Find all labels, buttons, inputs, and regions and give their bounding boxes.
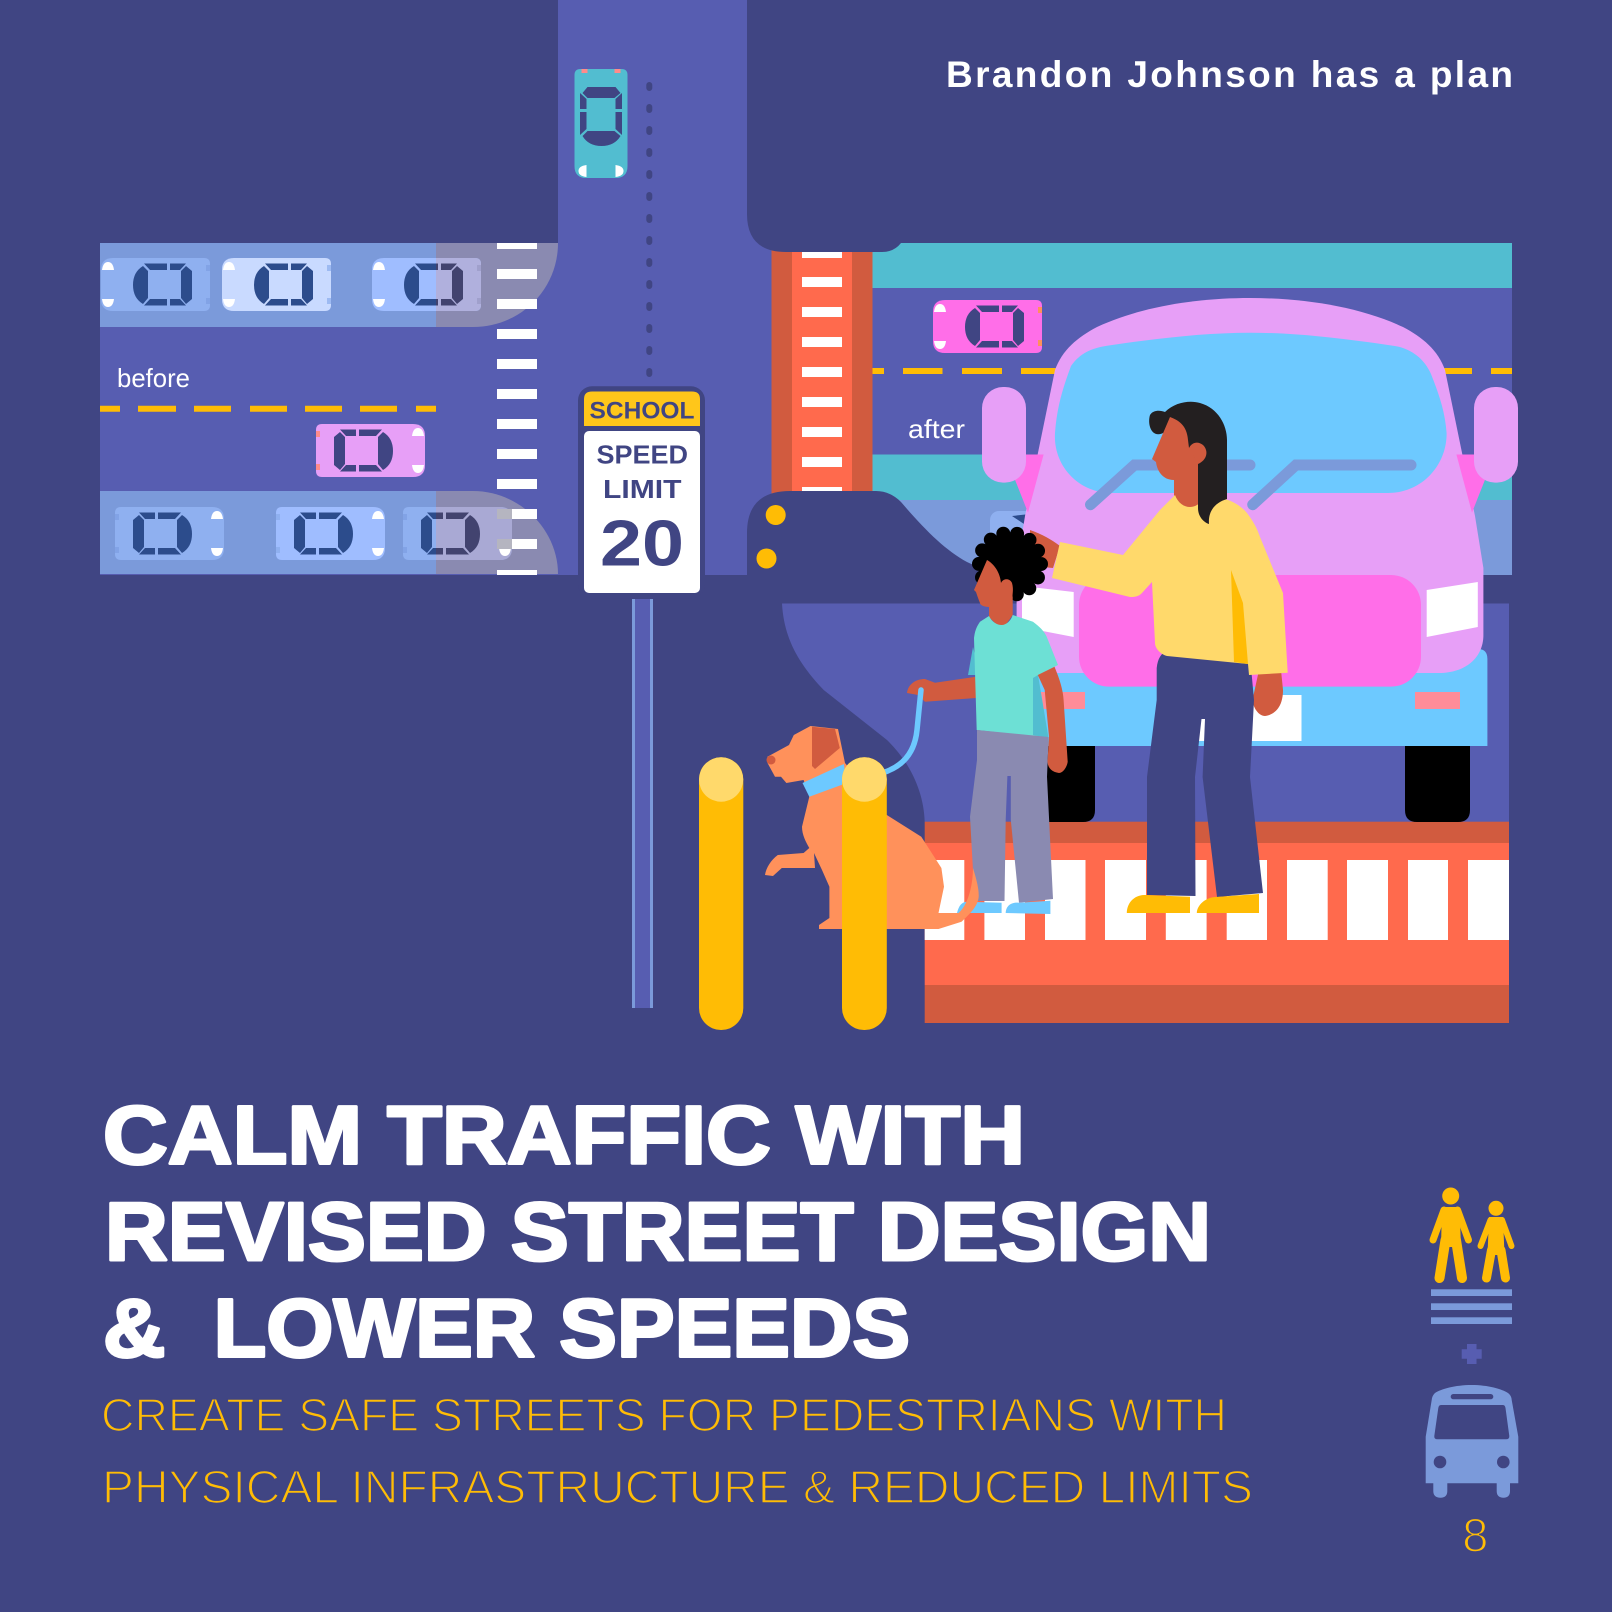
- curb extension top: [436, 243, 558, 327]
- illustration: boy: [907, 533, 1068, 914]
- licence plate: [1198, 695, 1302, 741]
- illustration: bus: [982, 298, 1518, 822]
- shoes: [957, 901, 1050, 914]
- sleeve shadow: [968, 647, 980, 675]
- dotted centre line: [646, 85, 652, 376]
- face and neck: [1152, 417, 1198, 512]
- header: Brandon Johnson has a plan: Brandon Johnson has a plan: [946, 54, 1513, 95]
- lower crossing: [925, 822, 1509, 1023]
- ear: [1189, 443, 1206, 464]
- cars under curb overlay: [436, 258, 512, 560]
- road connector: [747, 200, 773, 540]
- pink moving car: [316, 424, 425, 477]
- dog nose: [766, 756, 776, 764]
- parking lane: [872, 500, 1512, 575]
- panel: after street: [747, 180, 1512, 1023]
- page number: 8: [1462, 1508, 1488, 1562]
- parked cars bottom row: [115, 507, 512, 560]
- parking lane top: [100, 243, 436, 327]
- bollard right: [842, 757, 887, 1030]
- trousers: [1147, 650, 1263, 897]
- mirror arms: [1005, 454, 1495, 513]
- subheading: CREATE SAFE STREETS FOR PEDESTRIANS WITH: [101, 1389, 1227, 1441]
- holding arm: [907, 677, 976, 702]
- road surface: [100, 0, 747, 575]
- subheading: [101, 1389, 1253, 1513]
- crosswalk bars: [497, 243, 537, 575]
- panel: before street: [100, 0, 747, 575]
- school speed limit sign: SCHOOL: [590, 397, 694, 424]
- leash: [885, 690, 921, 772]
- sweater: [1052, 495, 1288, 675]
- school speed limit sign: [578, 386, 705, 598]
- bike lane bottom: [872, 454, 1512, 500]
- lower road: [782, 604, 1509, 822]
- parking lane bottom: [100, 491, 436, 574]
- upper corner kerb: [747, 180, 905, 252]
- road lane: [872, 288, 1512, 455]
- hair lock over sweater: [1198, 450, 1227, 524]
- curb extension bottom: [436, 491, 558, 574]
- windshield: [1055, 333, 1447, 493]
- mirrors: [982, 387, 1518, 483]
- school speed limit sign: 20: [600, 506, 684, 579]
- icon: crosswalk stripes: [1431, 1289, 1512, 1324]
- hot pink car: [933, 300, 1042, 353]
- label: before: before: [117, 363, 190, 393]
- shoes: [1127, 894, 1259, 913]
- dog collar: [802, 764, 847, 797]
- subheading: PHYSICAL INFRASTRUCTURE & REDUCED LIMITS: [102, 1461, 1253, 1513]
- dog ear: [812, 727, 840, 769]
- head and neck: [974, 560, 1013, 630]
- teal car: [574, 69, 628, 178]
- bumper: [1013, 649, 1487, 746]
- icon: plus: [1462, 1344, 1482, 1364]
- hair: [979, 533, 1041, 595]
- wipers: [1090, 465, 1411, 505]
- sweater fold: [1231, 570, 1248, 664]
- dashed line: [872, 368, 1512, 374]
- raised crossing: [772, 245, 872, 500]
- hand on child: [1030, 530, 1060, 568]
- free arm: [1038, 667, 1068, 773]
- parked cars top row: [101, 258, 481, 311]
- headlights: [1022, 582, 1478, 637]
- school speed limit sign: LIMIT: [603, 474, 682, 504]
- heading: CALM TRAFFIC WITH: [103, 1088, 1025, 1182]
- bollard left: [699, 757, 743, 1030]
- tail lights: [1040, 692, 1460, 709]
- dog body: [765, 726, 979, 929]
- heading: & LOWER SPEEDS: [103, 1282, 910, 1374]
- grille: [1079, 575, 1421, 687]
- shirt shadow: [1033, 675, 1048, 738]
- bike lane top: [872, 243, 1512, 288]
- icon: bus: [1426, 1385, 1518, 1498]
- school speed limit sign: SPEED: [596, 439, 688, 469]
- heading: REVISED STREET DESIGN: [105, 1185, 1211, 1278]
- illustration: woman: [1030, 402, 1288, 913]
- traffic calming dots: [756, 505, 786, 568]
- parked car peek: [990, 511, 1040, 561]
- icon: pedestrians: [1433, 1188, 1512, 1278]
- t-shirt: [974, 615, 1058, 738]
- hair back: [1149, 402, 1227, 480]
- wheels: [1030, 740, 1470, 822]
- right hand: [1253, 670, 1283, 716]
- lower corner kerb: [747, 491, 995, 575]
- bus body: [1017, 298, 1483, 673]
- trousers: [970, 730, 1053, 903]
- heading: [103, 1088, 1211, 1374]
- raised crossing bars: [802, 250, 842, 497]
- centre dashed line: [100, 406, 436, 412]
- sign pole: [632, 599, 653, 1008]
- illustration: dog: [765, 690, 979, 929]
- label: after: after: [908, 414, 965, 444]
